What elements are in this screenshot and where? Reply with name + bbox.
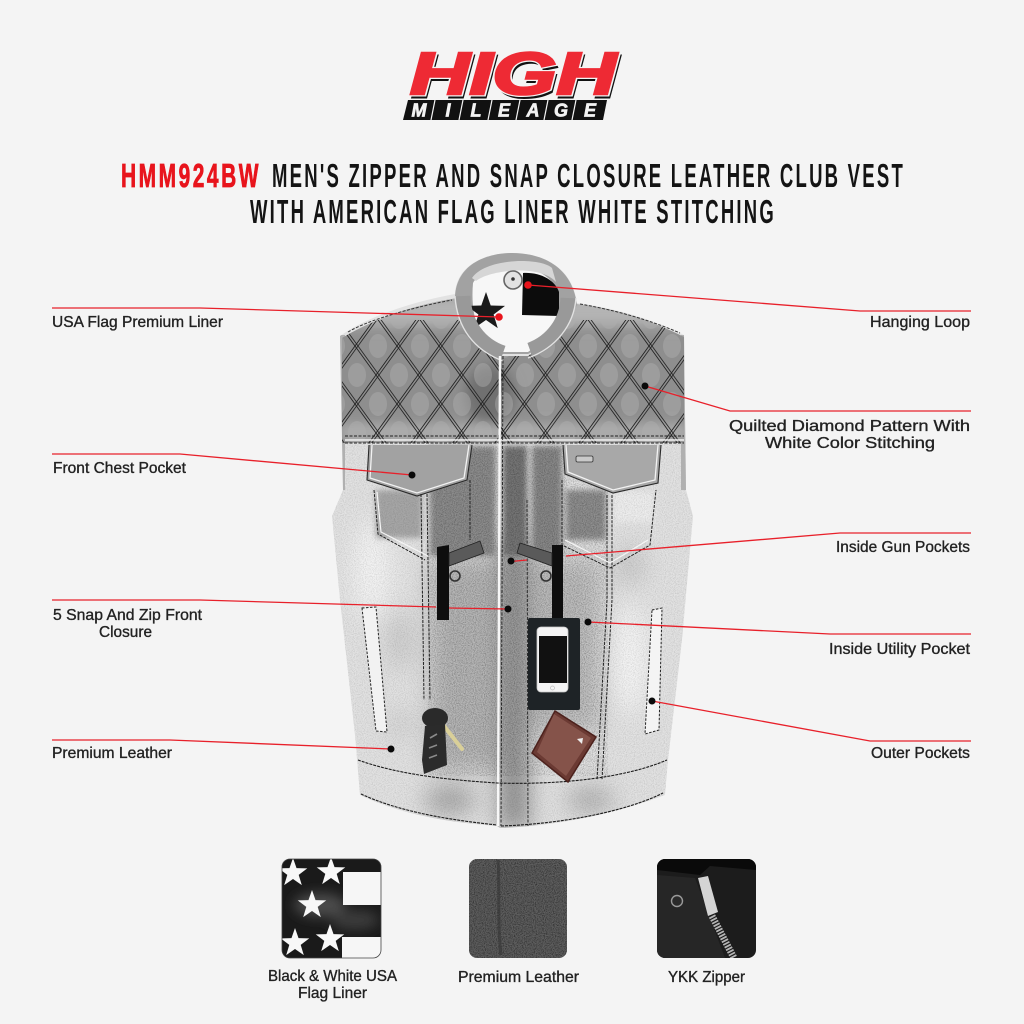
collar band (463, 296, 503, 353)
vest body (325, 250, 700, 835)
callout: 5 Snap And Zip Front Closure: Closure (99, 624, 152, 641)
quilted yoke (340, 296, 690, 444)
wallet (532, 711, 596, 782)
logo word HIGH: HIGH (410, 41, 618, 107)
flap (563, 445, 661, 493)
feature: flag liner (268, 857, 397, 1002)
callout: Hanging Loop (524, 281, 971, 331)
center placket (498, 356, 528, 826)
zipper swatch (657, 859, 756, 958)
callout: Front Chest Pocket: Front Chest Pocket (53, 460, 187, 477)
callout: USA Flag Premium Liner: USA Flag Premium Liner (52, 314, 224, 331)
side shoulder strips (340, 335, 345, 490)
callout: Outer Pockets (648, 698, 971, 762)
pocket stitching (562, 480, 656, 780)
callout: Inside Utility Pocket: Inside Utility Pocket (829, 641, 971, 658)
lower chest panels (376, 446, 654, 556)
feature: flag liner: Flag Liner (298, 985, 368, 1002)
logo word MILEAGE: MILEAGE (412, 100, 597, 120)
callout: Quilted Diamond Pattern (642, 382, 971, 452)
logo word HIGH: HIGH (410, 41, 618, 107)
feature: YKK zipper: YKK Zipper (668, 969, 746, 986)
logo word HIGH (410, 41, 620, 110)
hanging loop (504, 271, 522, 289)
right side pocket (645, 608, 662, 734)
product code: HMM924BW (121, 157, 261, 194)
leather swatch (469, 859, 567, 958)
hem stitching (358, 760, 667, 826)
callout: Premium Leather: Premium Leather (52, 745, 173, 762)
callout: Inside Utility Pocket (584, 618, 971, 658)
car key (422, 708, 462, 774)
pocket stitching (374, 480, 470, 700)
flap (367, 445, 472, 496)
callout: Hanging Loop: Hanging Loop (870, 314, 970, 331)
logo word HIGH: HIGH (412, 44, 620, 110)
liner flag patch (522, 273, 559, 316)
vest illustration (325, 250, 700, 835)
collar and liner (455, 253, 577, 361)
title (121, 157, 905, 230)
utility pouch (528, 618, 580, 710)
callout: Inside Gun Pockets (508, 533, 971, 564)
liner (472, 268, 559, 352)
callout: USA Flag Premium Liner (52, 308, 503, 331)
left side pocket (362, 607, 387, 732)
callout: Inside Gun Pockets: Inside Gun Pockets (836, 539, 970, 556)
callout: Premium Leather (52, 740, 394, 762)
callout: Front Chest Pocket (52, 454, 416, 478)
right chest pocket (562, 445, 661, 780)
left gun (437, 541, 484, 620)
callout: Outer Pockets: Outer Pockets (871, 745, 970, 762)
right gun (517, 543, 563, 618)
feature: YKK zipper (657, 859, 756, 986)
flag swatch (279, 857, 381, 958)
leather grain (325, 440, 700, 835)
callout: Quilted Diamond Pattern: Quilted Diamond Pattern With (729, 418, 970, 435)
left chest pocket (367, 445, 472, 700)
feature: flag liner: Black & White USA (268, 968, 397, 985)
phone (537, 627, 568, 692)
callout: 5 Snap And Zip Front Closure: 5 Snap And Zip Front (53, 607, 203, 624)
callout: Quilted Diamond Pattern: White Color Stitching (765, 435, 935, 452)
feature: premium leather: Premium Leather (458, 969, 580, 986)
snap tag (576, 456, 593, 462)
liner star (467, 292, 505, 328)
feature: premium leather (458, 859, 580, 986)
yoke seam (345, 436, 684, 443)
logo: High Mileage (403, 41, 620, 120)
callout: 5 Snap And Zip Front Closure (52, 600, 512, 641)
